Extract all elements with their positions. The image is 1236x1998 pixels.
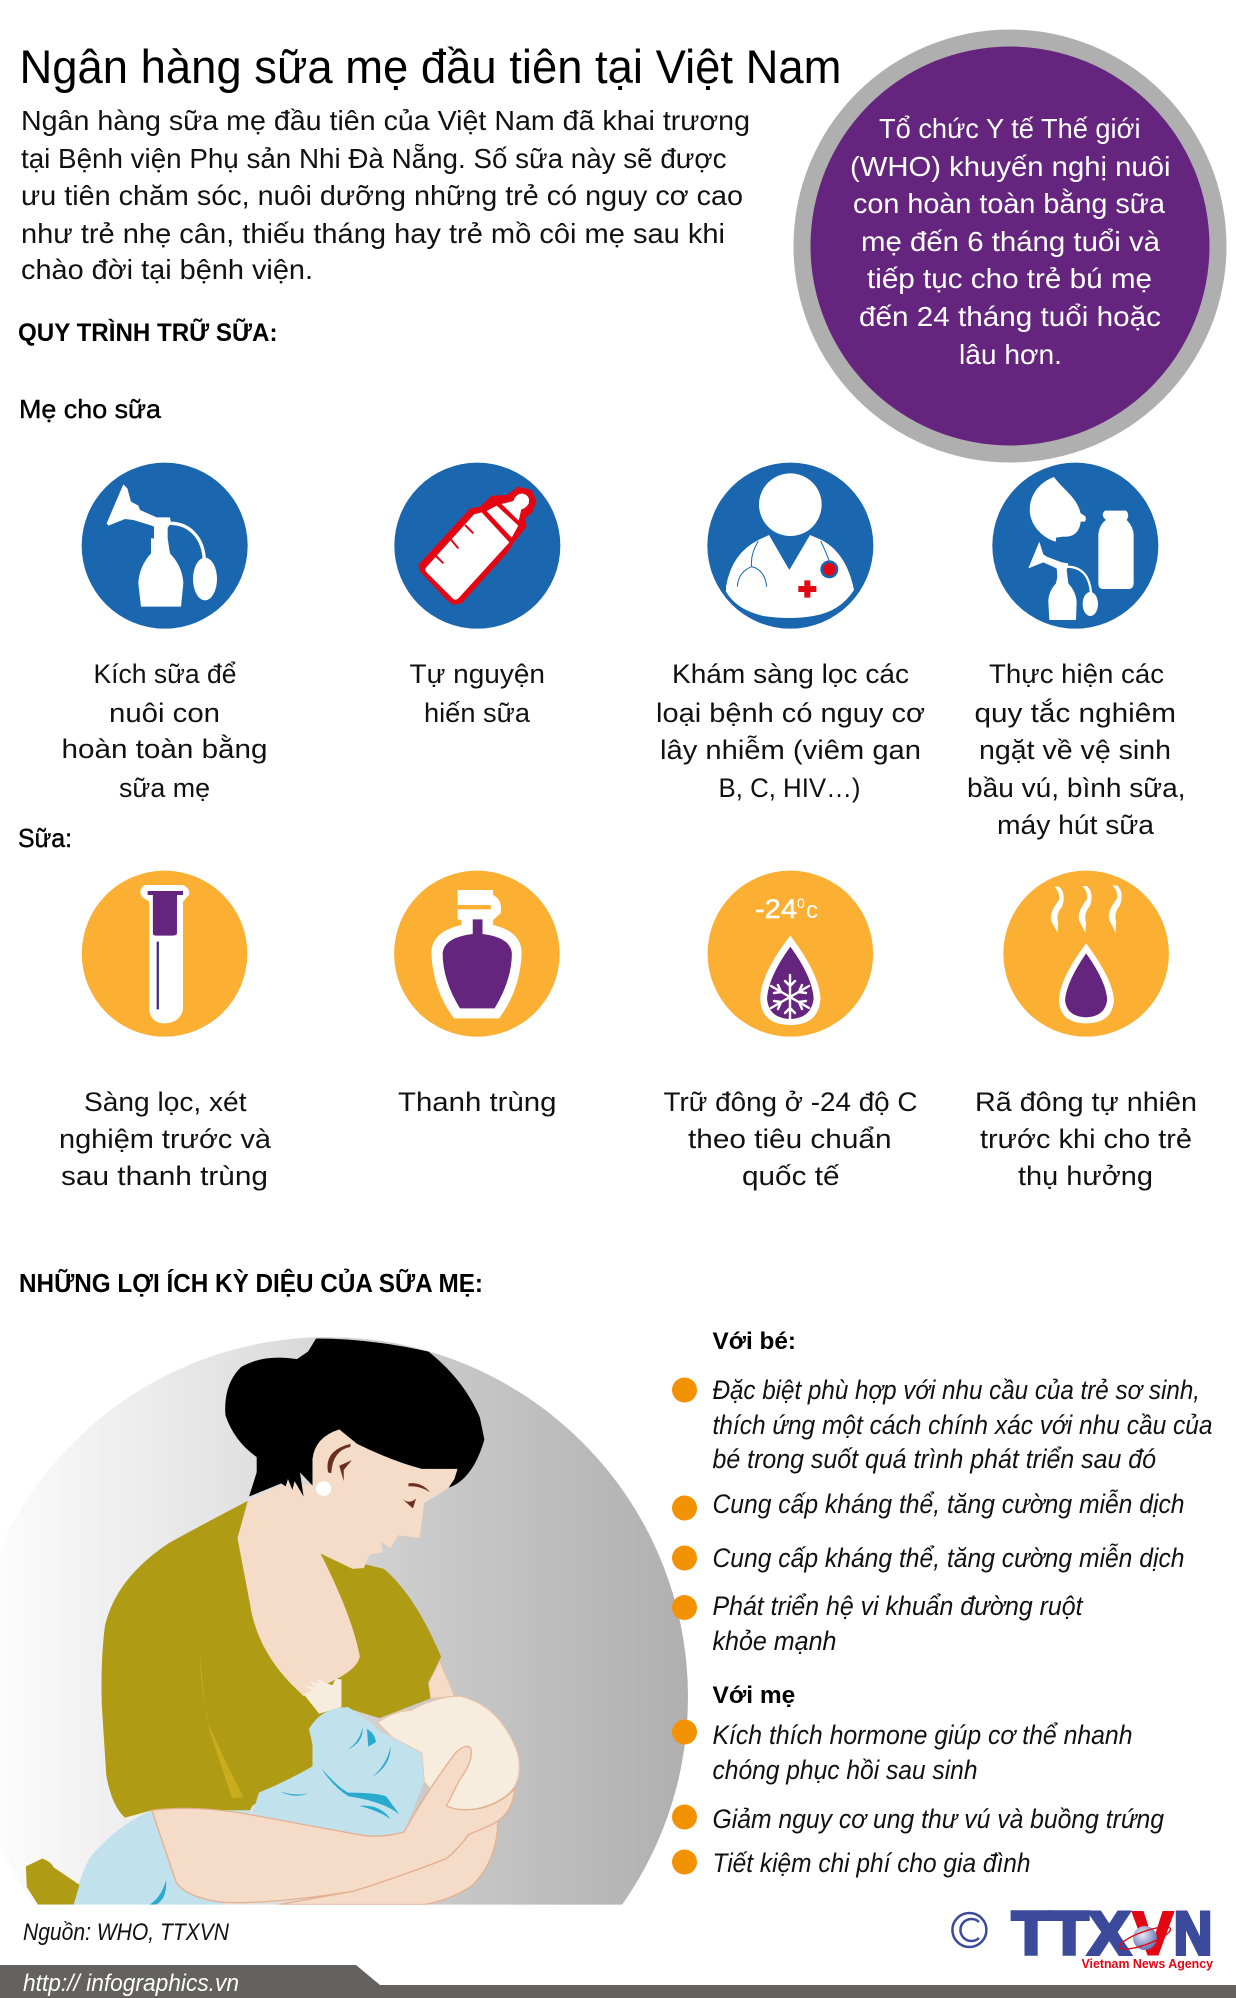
intro paragraph: Ngân hàng sữa mẹ đầu tiên của Việt Nam đã khai trương xyxy=(21,105,750,136)
caption: tự nguyện: Tự nguyện xyxy=(410,659,545,689)
icon: hygiene breast pump bottle xyxy=(992,463,1158,629)
copyright mark xyxy=(952,1913,986,1947)
callout: WHO recommendation circle: mẹ đến 6 tháng tuổi và xyxy=(861,226,1161,257)
caption: trữ đông: theo tiêu chuẩn xyxy=(688,1124,892,1154)
intro paragraph: chào đời tại bệnh viện. xyxy=(21,254,313,285)
caption: khám sàng lọc: Khám sàng lọc các xyxy=(672,659,909,689)
subheading: với bé: Với bé: xyxy=(712,1328,796,1355)
benefit list for baby: Cung cấp kháng thể, tăng cường miễn dịch xyxy=(712,1543,1184,1573)
callout: WHO recommendation circle: tiếp tục cho trẻ bú mẹ xyxy=(867,263,1152,294)
caption: kích sữa: hoàn toàn bằng xyxy=(62,734,268,764)
benefit list for baby xyxy=(712,1375,1212,1656)
benefit bullets for mother xyxy=(672,1720,697,1874)
callout: WHO recommendation circle: đến 24 tháng tuổi hoặc xyxy=(859,301,1161,332)
panel: benefits for baby xyxy=(672,1328,1212,1656)
title: Ngân hàng sữa mẹ đầu tiên tại Việt Nam xyxy=(20,40,842,93)
caption: sàng lọc: sau thanh trùng xyxy=(61,1161,268,1191)
caption: quy tắc vệ sinh: Thực hiện các xyxy=(989,659,1164,689)
caption: trữ đông xyxy=(664,1087,918,1191)
footer bar xyxy=(0,1965,1236,1998)
caption: trữ đông: Trữ đông ở -24 độ C xyxy=(664,1087,918,1117)
logo: TTXVN: Vietnam News Agency xyxy=(1082,1956,1214,1971)
benefit list for mother xyxy=(712,1720,1164,1878)
caption: rã đông: Rã đông tự nhiên xyxy=(975,1087,1197,1117)
caption: quy tắc vệ sinh: máy hút sữa xyxy=(997,810,1154,840)
caption: quy tắc vệ sinh: quy tắc nghiêm xyxy=(974,698,1176,728)
benefit list for mother: Tiết kiệm chi phí cho gia đình xyxy=(712,1848,1030,1878)
caption: quy tắc vệ sinh xyxy=(967,659,1186,840)
benefit list for mother: chóng phục hồi sau sinh xyxy=(712,1755,978,1785)
subheading: với mẹ: Với mẹ xyxy=(712,1682,795,1709)
caption: quy tắc vệ sinh: bầu vú, bình sữa, xyxy=(967,773,1186,803)
logo: TTXVN: TTX xyxy=(1012,1900,1130,1967)
subheading: sữa: Sữa: xyxy=(18,823,72,853)
callout: WHO recommendation circle: lâu hơn. xyxy=(959,339,1062,370)
caption: khám sàng lọc: lây nhiễm (viêm gan xyxy=(660,735,921,765)
logo: TTXVN: V xyxy=(1133,1900,1173,1967)
caption: kích sữa: sữa mẹ xyxy=(119,773,210,803)
caption: khám sàng lọc: loại bệnh có nguy cơ xyxy=(656,698,925,728)
benefit list for baby: Phát triển hệ vi khuẩn đường ruột xyxy=(712,1591,1084,1621)
subheading: mẹ cho sữa: Mẹ cho sữa xyxy=(19,394,162,424)
icon: breast pump xyxy=(82,463,248,629)
callout: WHO recommendation circle: Tổ chức Y tế Thế giới xyxy=(879,113,1140,144)
caption: sàng lọc: Sàng lọc, xét xyxy=(84,1087,247,1117)
caption: tự nguyện: hiến sữa xyxy=(424,698,530,728)
caption: rã đông: trước khi cho trẻ xyxy=(980,1124,1192,1154)
heading: quy trình trữ sữa: QUY TRÌNH TRỮ SỮA: xyxy=(18,317,278,347)
benefit bullets for baby xyxy=(672,1378,697,1620)
illustration: mother breastfeeding baby xyxy=(26,1337,688,1905)
intro paragraph xyxy=(21,105,750,285)
icon: doctor xyxy=(707,463,873,629)
caption: trữ đông: quốc tế xyxy=(742,1161,840,1191)
intro paragraph: ưu tiên chăm sóc, nuôi dưỡng những trẻ có nguy cơ cao xyxy=(21,180,743,211)
source: Nguồn: WHO, TTXVN xyxy=(23,1919,230,1946)
benefit list for baby: bé trong suốt quá trình phát triển sau đó xyxy=(712,1444,1156,1474)
logo: TTXVN xyxy=(1012,1900,1214,1971)
caption: thanh trùng: Thanh trùng xyxy=(398,1087,556,1117)
benefit list for baby: Cung cấp kháng thể, tăng cường miễn dịch xyxy=(712,1489,1184,1519)
caption: quy tắc vệ sinh: ngặt về vệ sinh xyxy=(979,735,1171,765)
caption: kích sữa: Kích sữa để xyxy=(94,659,236,689)
icon: baby bottle xyxy=(394,463,560,629)
callout: WHO recommendation circle: con hoàn toàn bằng sữa xyxy=(853,188,1166,219)
caption: kích sữa: nuôi con xyxy=(109,698,220,728)
caption: sàng lọc xyxy=(59,1087,271,1191)
heading: những lợi ích: NHỮNG LỢI ÍCH KỲ DIỆU CỦA SỮA MẸ: xyxy=(19,1267,483,1298)
benefit list for baby: Đặc biệt phù hợp với nhu cầu của trẻ sơ sinh, xyxy=(712,1375,1200,1405)
icon: frozen drop: c xyxy=(806,897,818,924)
icon: perfume-shaped bottle xyxy=(394,871,560,1037)
caption: khám sàng lọc: B, C, HIV…) xyxy=(718,773,860,803)
caption: kích sữa xyxy=(62,659,268,803)
caption: sàng lọc: nghiệm trước và xyxy=(59,1124,271,1154)
callout: WHO recommendation circle xyxy=(794,30,1226,462)
logo: TTXVN: N xyxy=(1174,1900,1212,1967)
icon: frozen drop xyxy=(708,871,873,1037)
intro paragraph: như trẻ nhẹ cân, thiếu tháng hay trẻ mồ côi mẹ sau khi xyxy=(21,218,725,249)
intro paragraph: tại Bệnh viện Phụ sản Nhi Đà Nẵng. Số sữa này sẽ được xyxy=(21,143,727,174)
caption: rã đông xyxy=(975,1087,1197,1191)
benefit list for mother: Kích thích hormone giúp cơ thể nhanh xyxy=(712,1720,1132,1750)
caption: tự nguyện xyxy=(410,659,545,728)
footer bar: http:// infographics.vn xyxy=(23,1970,239,1997)
panel: benefits for mother xyxy=(672,1682,1164,1878)
caption: rã đông: thụ hưởng xyxy=(1018,1161,1153,1191)
icon: frozen drop: 0 xyxy=(797,895,805,911)
icon: thawing drop with steam xyxy=(1003,871,1169,1037)
callout: WHO recommendation circle: (WHO) khuyến nghị nuôi xyxy=(850,151,1170,182)
icon: frozen drop: -24 xyxy=(755,894,797,924)
benefit list for mother: Giảm nguy cơ ung thư vú và buồng trứng xyxy=(712,1804,1164,1834)
benefit list for baby: khỏe mạnh xyxy=(712,1626,836,1656)
caption: khám sàng lọc xyxy=(656,659,925,803)
icon: test tube xyxy=(82,871,247,1037)
